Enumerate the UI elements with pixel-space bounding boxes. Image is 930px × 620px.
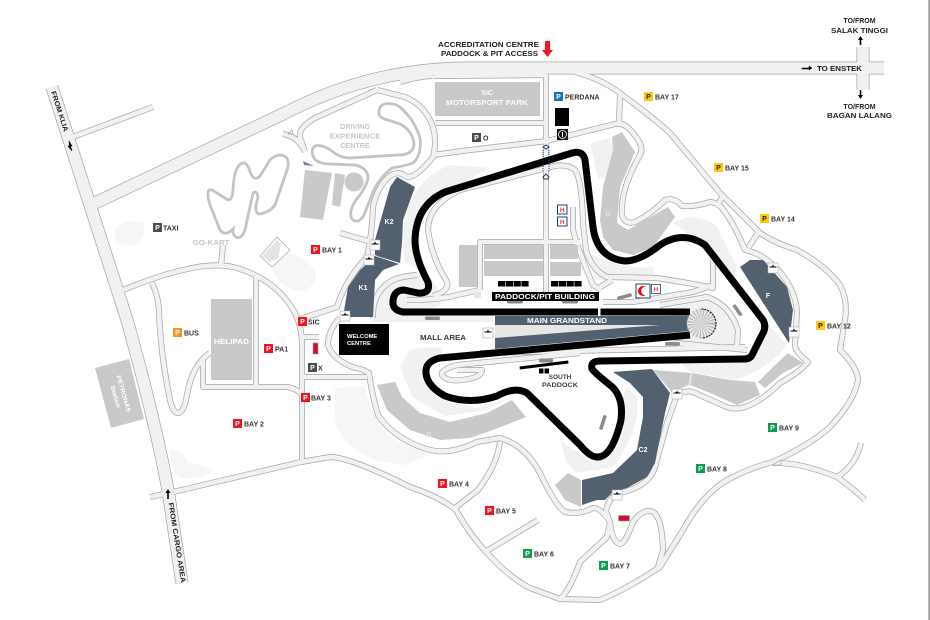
parking: bay 4: BAY 4 [449,482,469,488]
ferris wheel [687,309,716,338]
arrow: from cargo area [166,489,170,499]
driving experience buildings [300,170,364,220]
parking: pa1: P [266,346,271,353]
parking: x [308,363,323,372]
parking: taxi: P [155,225,160,232]
south-east grandstands [555,353,803,507]
race track [393,152,765,457]
parking: bay 2: P [235,421,240,428]
parking: bay 17: P [646,94,651,101]
red gate near sic [313,343,318,354]
parking: bay 5: P [487,508,492,515]
parking: pa1 [264,344,288,354]
icon: helipad h lower [558,217,567,226]
parking: taxi: TAXI [163,226,178,232]
main grandstand: MAIN GRANDSTAND [527,316,608,325]
petronas station block: PETRONAS [115,375,131,413]
parking: perdana: P [556,94,561,101]
parking: sic: SIC [308,320,320,326]
parking: bay 3: BAY 3 [311,396,331,402]
parking: bay 8: BAY 8 [707,466,727,474]
grandstand c2 [582,369,670,505]
sic motorsport park block [435,82,540,116]
driving experience label: CENTRE [340,141,370,150]
parking: bay 5 [485,506,516,516]
parking: bay 6 [523,549,554,558]
parking: bay 12 [816,321,851,330]
driving experience label [330,122,381,150]
parking: bay 1: BAY 1 [322,248,342,254]
small blue marker near driving centre [303,161,314,166]
south paddock label: SOUTH [549,374,572,381]
helipad block [211,299,252,380]
driving experience track [312,104,420,221]
parking: bay 4: P [440,481,445,488]
mall area label: MALL AREA [420,333,467,342]
black building near perdana [555,108,569,126]
parking: perdana: PERDANA [565,94,600,102]
parking: bay 14: BAY 14 [771,216,795,224]
to/from bagan lalang label: BAGAN LALANG [827,113,893,120]
parking: sic: P [300,319,305,326]
paddock/pit building label: PADDOCK/PIT BUILDING [495,292,595,301]
from cargo area label: FROM CARGO AREA [167,502,186,583]
parking: x: X [318,366,323,372]
icon: helipad h upper: H [560,207,565,214]
icon: helipad h upper [558,205,567,214]
parking: bay 1: P [313,247,318,254]
south paddock garages [519,361,569,374]
arrow: to enstek [802,66,812,70]
grandstand g [600,132,675,255]
petronas station block [95,359,144,428]
traffic islands [288,130,781,465]
parking: bus [173,328,199,338]
parking: bay 4 [438,479,469,488]
grandstand b: B [426,432,432,439]
parking: taxi [153,223,178,232]
icon: helipad h lower: H [560,219,565,226]
gate icons [340,240,799,500]
to/from salak tinggi label: TO/FROM [843,18,876,25]
go-kart track [208,155,288,238]
south paddock label: PADDOCK [542,382,578,389]
parking: bay 9: BAY 9 [779,426,799,432]
to enstek label: TO ENSTEK [817,66,862,73]
grandstand f [740,260,793,343]
paddock garages [498,281,582,286]
page edge line [928,0,930,620]
go-kart label: GO-KART [192,238,230,247]
parking: bay 15 [714,163,749,172]
land texture patches [115,221,430,478]
arrow: from klia [68,141,72,151]
accreditation label: ACCREDITATION CENTRE [438,42,539,49]
accreditation label: PADDOCK & PIT ACCESS [441,51,538,58]
parking: bay 7: BAY 7 [610,564,630,570]
welcome centre: WELCOME [347,334,377,340]
parking: bay 2 [233,419,264,428]
grandstand k1 [343,256,399,317]
go-kart diamond building [260,237,290,267]
parking: bay 12: BAY 12 [827,324,851,330]
south paddock label [542,374,578,389]
parking: bay 3: P [303,395,308,402]
grandstand f: F [766,293,771,300]
driving experience label: DRIVING [340,122,370,131]
to/from bagan lalang label: TO/FROM [843,104,876,111]
parking: o [472,133,489,142]
parking: o: P [474,135,479,142]
parking: bay 7 [599,561,630,570]
grandstand k2: K2 [385,219,394,226]
pedestrian bridges [425,293,743,430]
red gate south [618,516,630,521]
welcome centre: CENTRE [347,341,371,347]
parking: bay 5: BAY 5 [496,508,516,516]
parking: bus: P [175,330,180,337]
icon: medical crescent [636,284,650,298]
arrow: down to bagan lalang [858,90,863,99]
parking: bay 8: P [698,466,703,473]
to/from bagan lalang label [827,104,893,120]
parking: bay 15: BAY 15 [725,166,749,172]
grandstand c2: C2 [639,447,648,454]
parking: pa1: PA1 [275,346,288,354]
helipad block: HELIPAD [214,337,250,346]
icon: medical h [652,284,660,294]
parking: bay 8 [696,464,727,474]
parking: bay 9 [768,423,799,432]
paddock blocks [459,245,581,298]
parking: bay 1 [311,245,342,254]
parking: bay 7: P [601,563,606,570]
main grandstand [495,316,690,349]
grandstand k1: K1 [359,285,368,292]
grandstand b [377,382,526,440]
to/from salak tinggi label [831,18,888,35]
arrow: accreditation red [542,41,553,57]
footbridge gate near access road [543,145,549,179]
parking: bay 17 [644,92,679,102]
arrow: up to salak tinggi [858,36,863,45]
parking: bay 15: P [716,165,721,172]
grandstand g: G [605,211,611,218]
parking: sic [298,317,320,326]
parking: bay 14 [760,214,795,224]
parking: bay 14: P [762,216,767,223]
parking: bay 12: P [818,323,823,330]
start line marker [598,308,600,316]
to/from salak tinggi label: SALAK TINGGI [831,28,888,35]
parking: bay 17: BAY 17 [655,94,679,102]
parking: bay 6: P [525,551,530,558]
parking: bus: BUS [184,330,199,338]
grandstand k2 [375,177,415,263]
petronas station block: Station [109,385,121,409]
road network [52,47,884,600]
icon: medical h: H [654,286,659,294]
accreditation label [438,42,539,58]
parking: x: P [310,365,315,372]
runoff areas [373,138,787,473]
parking: bay 3 [301,393,331,402]
parking: bay 2: BAY 2 [244,422,264,428]
parking: perdana [554,92,600,102]
parking: bay 6: BAY 6 [534,552,554,558]
parking: bay 9: P [770,425,775,432]
welcome centre [339,324,389,355]
driving experience label: EXPERIENCE [330,132,381,140]
sic motorsport park block: MOTORSPORT PARK [446,100,528,107]
parking: o: O [483,136,489,142]
icon: information [557,129,568,140]
from klia label: FROM KLIA [49,90,69,133]
sic motorsport park block: SIC [481,90,493,97]
